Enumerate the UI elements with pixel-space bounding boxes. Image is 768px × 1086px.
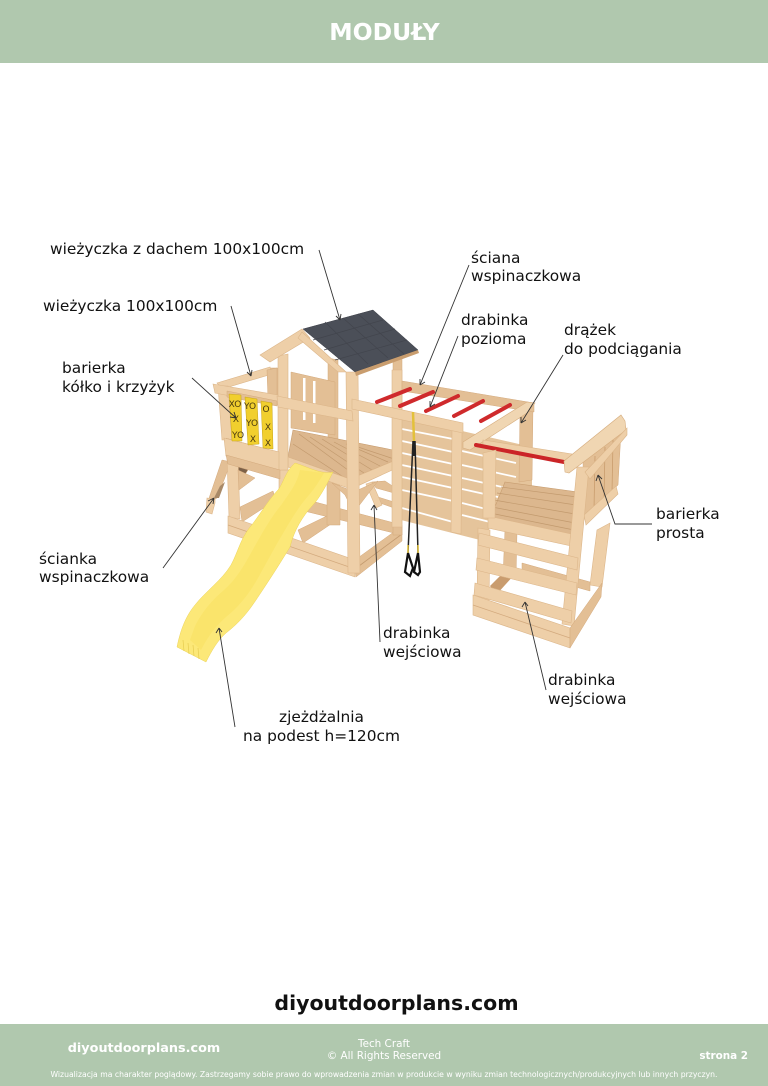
website heading: diyoutdoorplans.com bbox=[274, 991, 519, 1015]
climbing wall boards bbox=[401, 417, 532, 540]
bar support beam bbox=[483, 440, 572, 463]
lower frame posts bbox=[227, 457, 240, 519]
posts bbox=[483, 450, 496, 518]
roof bbox=[303, 310, 419, 376]
title: MODUŁY bbox=[329, 18, 441, 46]
top rail bbox=[564, 415, 626, 473]
deck braces bbox=[332, 483, 350, 505]
page number: strona 2 bbox=[699, 1050, 748, 1062]
red rungs bbox=[377, 389, 510, 421]
front beam bbox=[352, 399, 463, 433]
module: climbing wall and monkey bars bbox=[352, 370, 535, 576]
label: entry ladder middle: wejściowa bbox=[383, 643, 462, 661]
label: straight barrier: barierka bbox=[656, 505, 720, 523]
annotation leader lines bbox=[163, 250, 652, 727]
deck bbox=[490, 482, 578, 535]
back posts and back wall bbox=[328, 358, 338, 440]
tic-tac-toe panel: X bbox=[265, 423, 271, 433]
footer copyright: © All Rights Reserved bbox=[327, 1050, 441, 1062]
label: small climbing wall: wspinaczkowa bbox=[39, 568, 149, 586]
module: left tower with roof bbox=[206, 310, 419, 577]
label: slide: zjeżdżalnia bbox=[279, 708, 364, 726]
label: straight barrier: prosta bbox=[656, 524, 705, 542]
tic-tac-toe panel: X bbox=[250, 435, 256, 445]
gable and roof supports bbox=[260, 329, 346, 372]
tic-tac-toe panel: XO bbox=[229, 400, 241, 410]
label: slide: na podest h=120cm bbox=[243, 727, 400, 745]
label: monkey bars: drabinka bbox=[461, 311, 528, 329]
label: tic-tac-toe barrier: kółko i krzyżyk bbox=[62, 378, 175, 396]
back posts and base bbox=[490, 570, 515, 595]
label: pull-up bar: do podciągania bbox=[564, 340, 682, 358]
label: pull-up bar: drążek bbox=[564, 321, 616, 339]
tic-tac-toe panel: YO bbox=[231, 431, 244, 441]
front deck board bbox=[488, 516, 576, 547]
sandbox frame front bbox=[228, 516, 355, 577]
back beam bbox=[402, 381, 534, 412]
footer website: diyoutdoorplans.com bbox=[68, 1041, 220, 1056]
label: entry ladder middle: drabinka bbox=[383, 624, 450, 642]
slide bbox=[177, 463, 333, 662]
footer band bbox=[0, 1024, 768, 1086]
label: entry ladder right: drabinka bbox=[548, 671, 615, 689]
footer copyright: Tech Craft bbox=[357, 1038, 410, 1050]
tic-tac-toe panel: X bbox=[265, 439, 271, 449]
base frame bbox=[473, 595, 570, 648]
railing tower left bbox=[213, 368, 353, 479]
playground illustration bbox=[177, 310, 627, 662]
disclaimer: Wizualizacja ma charakter poglądowy. Zastrzegamy sobie prawo do wprowadzenia zmian w produkcie w wyniku zmian technologicznych/produkcyjnych lub innych przyczyn. bbox=[50, 1070, 718, 1079]
label: small climbing wall: ścianka bbox=[39, 550, 97, 568]
left climbing wall bbox=[206, 460, 253, 514]
ladder rungs bbox=[474, 533, 578, 623]
header band bbox=[0, 0, 768, 63]
tic-tac-toe panel bbox=[229, 394, 273, 449]
tic-tac-toe panel: O bbox=[262, 405, 270, 415]
label: climbing wall: ściana bbox=[471, 249, 520, 267]
diagonal beam bbox=[463, 402, 535, 450]
label: tic-tac-toe barrier: barierka bbox=[62, 359, 126, 377]
suspension straps bbox=[405, 412, 420, 576]
label: tower with roof: wieżyczka z dachem 100x100cm bbox=[50, 240, 304, 258]
small entry ladder bbox=[366, 481, 394, 508]
label: climbing wall: wspinaczkowa bbox=[471, 267, 581, 285]
main deck bbox=[288, 430, 401, 479]
tic-tac-toe panel: YO bbox=[243, 402, 256, 412]
sandbox frame back beams bbox=[240, 491, 276, 522]
label: entry ladder right: wejściowa bbox=[548, 690, 627, 708]
rear barrier panel bbox=[583, 431, 621, 518]
label: tower: wieżyczka 100x100cm bbox=[43, 297, 217, 315]
tic-tac-toe panel: YO bbox=[245, 419, 258, 429]
tower posts bbox=[278, 354, 288, 470]
red pull-up bar bbox=[476, 445, 564, 462]
module: right tower bbox=[473, 415, 627, 648]
tic-tac-toe panel: X bbox=[233, 415, 239, 425]
label: monkey bars: pozioma bbox=[461, 330, 526, 348]
